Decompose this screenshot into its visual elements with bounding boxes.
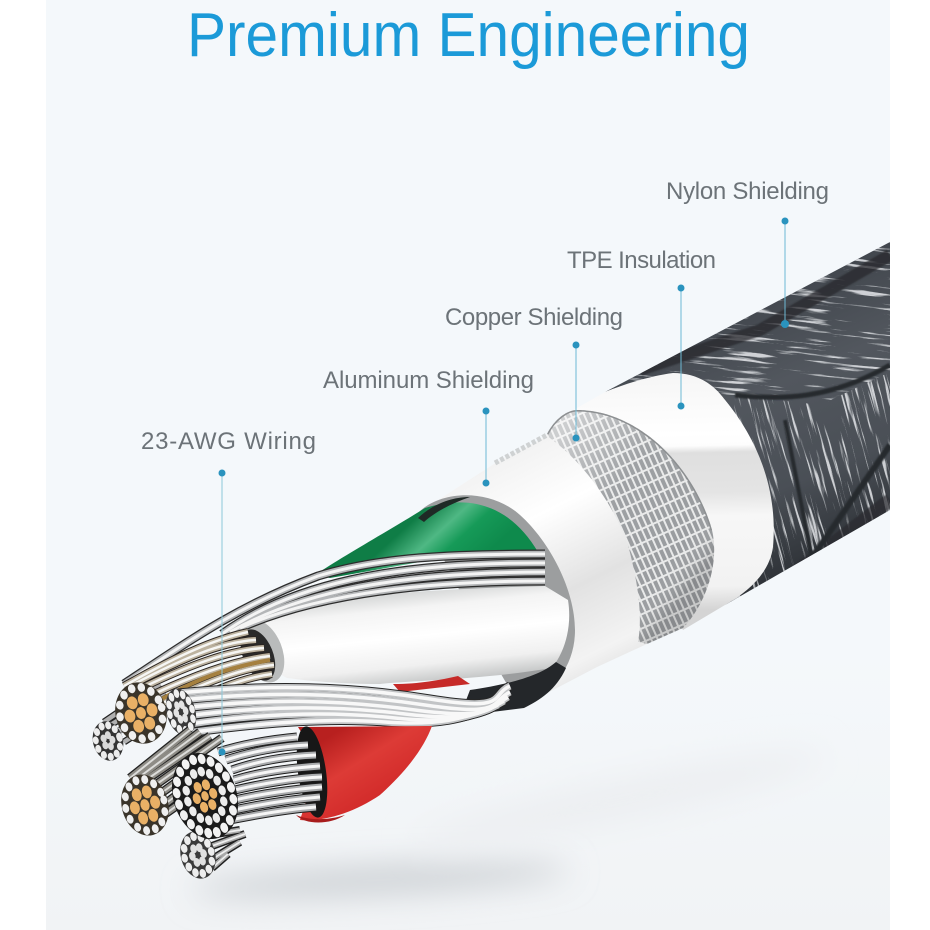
red inner conductor xyxy=(292,724,432,822)
aluminum shielding band xyxy=(418,435,647,705)
far left small wire xyxy=(88,684,165,764)
TPE insulation band xyxy=(570,373,774,630)
middle twisted silver strands xyxy=(161,685,510,739)
band hole rim and interior xyxy=(418,495,575,705)
copper shielding mesh xyxy=(547,410,714,644)
label: Copper Shielding xyxy=(445,304,623,442)
gold conductor wire upper left xyxy=(108,632,274,750)
top silver strand bundle xyxy=(124,554,545,684)
dark core opening xyxy=(418,497,470,522)
nylon shielding braid xyxy=(605,242,890,605)
label: Nylon Shielding: Nylon Shielding xyxy=(666,178,829,205)
label: TPE Insulation: TPE Insulation xyxy=(567,247,716,274)
label: Aluminum Shielding xyxy=(323,367,534,486)
white inner insulation xyxy=(231,586,569,689)
bottom small wire xyxy=(175,825,245,883)
label: Aluminum Shielding: Aluminum Shielding xyxy=(323,367,534,394)
title: Premium Engineering xyxy=(187,1,750,70)
ground shadow xyxy=(190,737,830,903)
label: Nylon Shielding xyxy=(666,178,829,328)
green inner conductor xyxy=(315,502,538,578)
front large wire xyxy=(161,737,322,848)
label: 23-AWG Wiring: 23-AWG Wiring xyxy=(141,428,316,455)
red core behind upper strands xyxy=(393,676,470,692)
label: TPE Insulation xyxy=(567,247,716,410)
label: 23-AWG Wiring xyxy=(141,428,316,756)
hole lower dark edge xyxy=(460,662,566,716)
cable illustration xyxy=(92,242,890,909)
lower gold conductor wire xyxy=(115,730,222,841)
label: Copper Shielding: Copper Shielding xyxy=(445,304,623,331)
